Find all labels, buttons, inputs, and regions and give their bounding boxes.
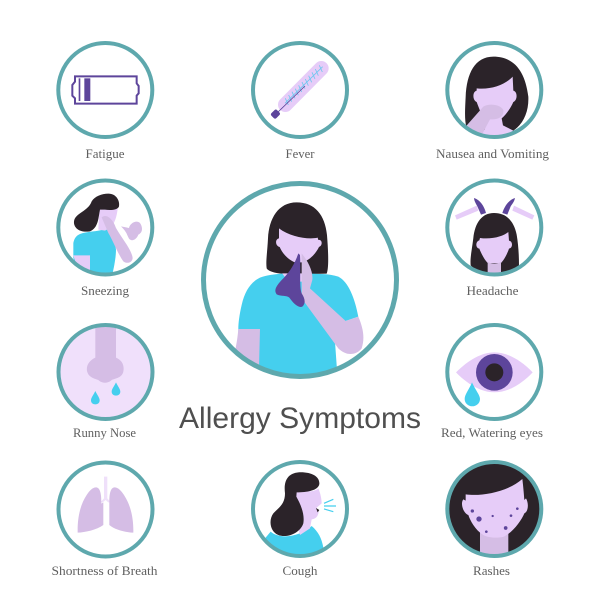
panel: nausea and vomiting: [436, 43, 550, 161]
panel: sneezing: [58, 180, 152, 298]
panel: main illustration, woman blowing nose: [204, 184, 396, 388]
panel: cough: [253, 462, 347, 578]
panel: runny nose: [58, 325, 152, 440]
label: headache: Headache: [466, 284, 519, 298]
icon: woman sneezing: [73, 194, 142, 276]
panel: shortness of breath: [52, 462, 158, 578]
label: red, watering eyes: Red, Watering eyes: [441, 426, 543, 440]
panel: fatigue: [58, 43, 152, 161]
label: nausea and vomiting: Nausea and Vomiting: [436, 147, 550, 161]
icon: woman with headache: [455, 198, 534, 276]
icon: thermometer: [270, 65, 323, 119]
label: shortness of breath: Shortness of Breath: [52, 564, 158, 578]
icon: low battery: [72, 76, 139, 104]
title: Allergy Symptoms: [179, 402, 421, 435]
icon: lungs: [78, 477, 133, 533]
icon: woman coughing: [263, 472, 336, 560]
label: rashes: Rashes: [473, 564, 510, 578]
icon: face with rash: [462, 479, 528, 558]
label: runny nose: Runny Nose: [73, 426, 136, 440]
label: sneezing: Sneezing: [81, 284, 130, 298]
icon: woman with tissue: [235, 202, 363, 388]
icon: nose with drops: [87, 325, 124, 404]
label: cough: Cough: [282, 564, 318, 578]
panel: fever: [253, 43, 347, 161]
icon: woman covering mouth: [465, 57, 528, 140]
label: fever: Fever: [286, 147, 315, 161]
panel: headache: [447, 180, 541, 298]
label: fatigue: Fatigue: [86, 147, 125, 161]
icon: watering eye: [456, 352, 533, 406]
panel: rashes: [447, 462, 541, 578]
panel: red, watering eyes: [441, 325, 543, 440]
